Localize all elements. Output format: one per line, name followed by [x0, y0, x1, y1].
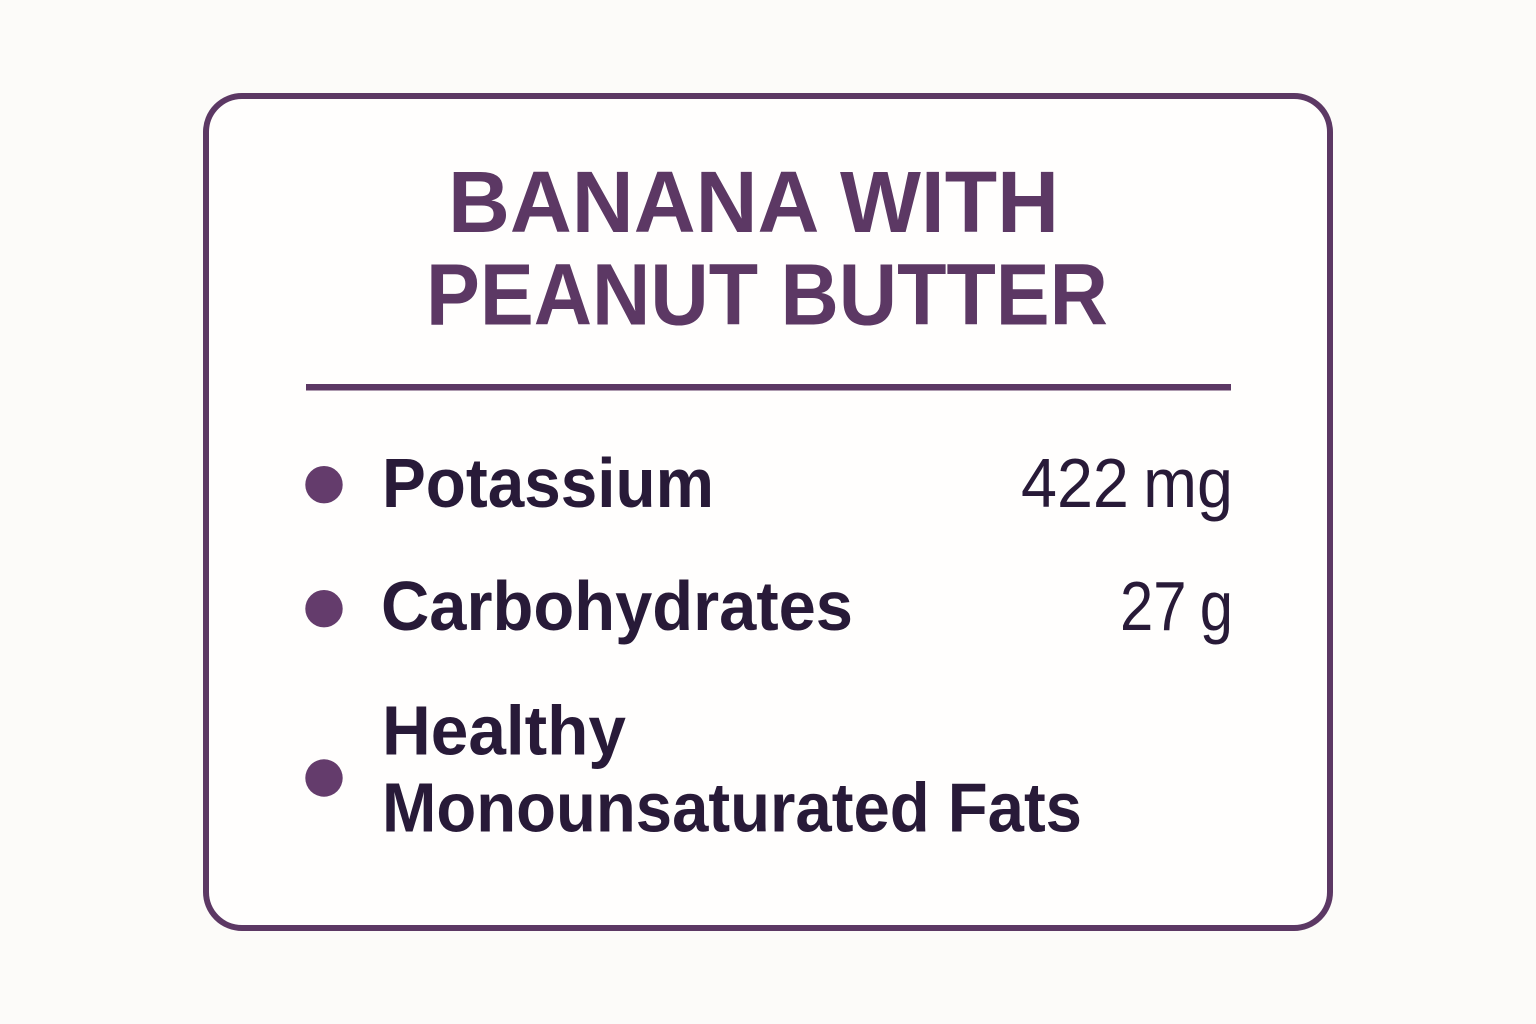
divider	[306, 384, 1231, 390]
row: potassium: Potassium	[382, 444, 714, 522]
title	[426, 154, 1108, 344]
row: carbohydrates: Carbohydrates	[381, 567, 853, 645]
row: potassium: 422 mg	[1021, 444, 1233, 522]
row: healthy fats	[305, 692, 1082, 846]
panel: nutrition card	[206, 96, 1330, 928]
row: potassium	[305, 444, 1233, 522]
title: PEANUT BUTTER	[426, 246, 1108, 344]
row: carbohydrates	[305, 567, 1233, 645]
row: healthy fats: Healthy	[382, 692, 626, 770]
row: healthy fats: Monounsaturated Fats	[382, 768, 1082, 846]
title: BANANA WITH	[448, 154, 1059, 251]
row: carbohydrates: 27 g	[1120, 567, 1233, 645]
